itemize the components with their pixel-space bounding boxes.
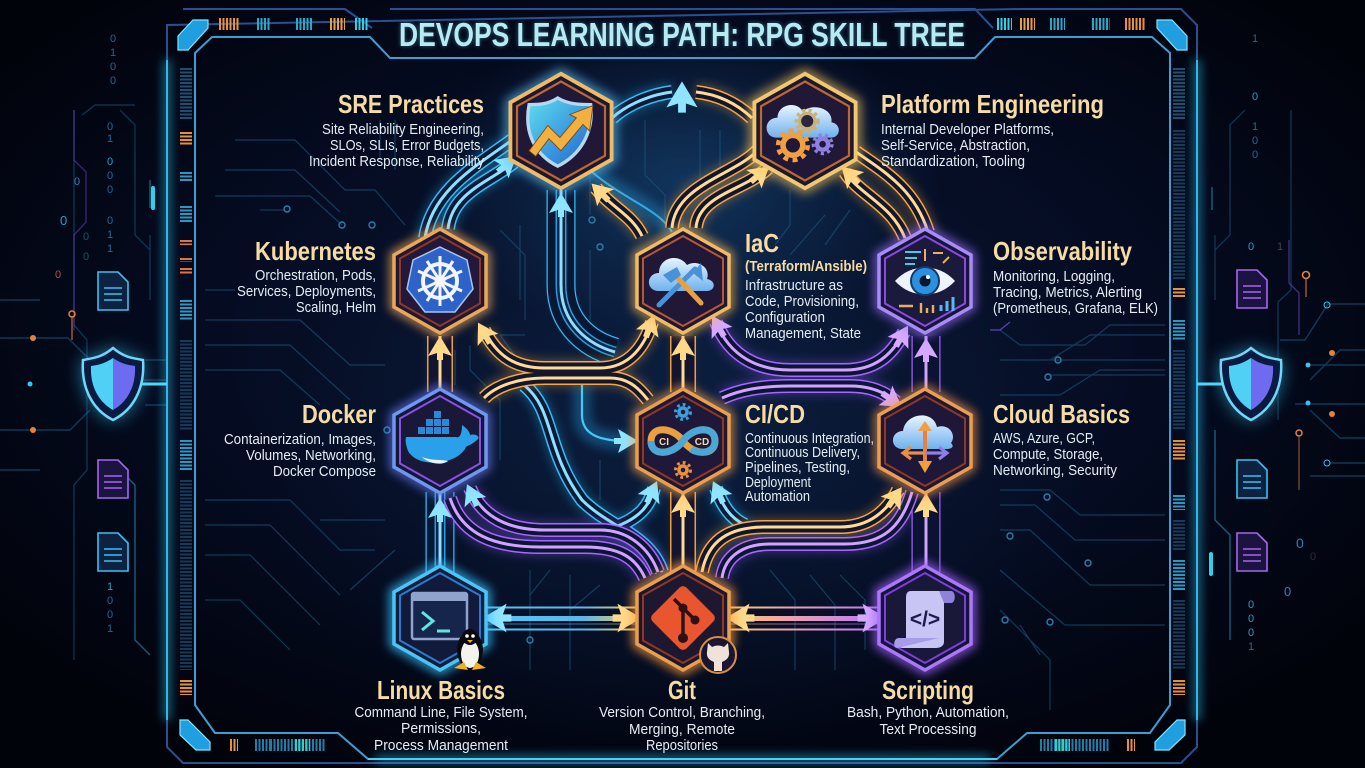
icon: right doc purple	[1237, 270, 1267, 308]
label: Platform Engineering: Platform Engineering	[881, 89, 1104, 119]
label: CI/CD: CI/CD	[745, 399, 805, 429]
led strips	[186, 24, 1179, 745]
right circuit side panel: 0	[1248, 613, 1254, 625]
label: CI/CD: Deployment	[745, 474, 812, 491]
left circuit side panel: 1	[107, 243, 113, 255]
label: SRE Practices: Incident Response, Reliability	[309, 153, 484, 170]
label: Git: Repositories	[646, 737, 718, 754]
title: DEVOPS LEARNING PATH: RPG SKILL TREE	[399, 16, 965, 53]
label: IaC: Code, Provisioning,	[745, 293, 859, 310]
hexagon node: Docker	[394, 389, 486, 493]
label: Cloud Basics: Compute, Storage,	[993, 446, 1103, 463]
label: Linux Basics	[354, 675, 528, 754]
right circuit side panel: 0	[1252, 135, 1258, 147]
icon: right doc purple lower	[1237, 533, 1267, 571]
label: Platform Engineering: Internal Developer Platforms,	[881, 121, 1054, 138]
horizontal path: Linux to Git	[486, 608, 636, 630]
hexagon node: Kubernetes	[394, 229, 486, 333]
icon: terminal window	[412, 593, 467, 639]
label: Git: Merging, Remote	[629, 721, 735, 738]
icon: infinity loop with gears: CI	[659, 437, 669, 448]
label: CI/CD: Continuous Delivery,	[745, 444, 860, 461]
left circuit side panel: 0	[55, 269, 61, 281]
icon: git logo	[649, 584, 717, 652]
hexagon node: Scripting	[879, 566, 971, 670]
icon: left doc blue lower	[98, 533, 128, 571]
hexagon node: SRE Practices	[510, 74, 612, 188]
label: IaC: Configuration	[745, 309, 825, 326]
left circuit side panel: 0	[107, 184, 113, 196]
left circuit side panel: 1	[107, 229, 113, 241]
label: Docker: Docker Compose	[273, 463, 376, 480]
icon: penguin	[454, 629, 486, 670]
label: IaC: Infrastructure as	[745, 277, 843, 294]
left circuit side panel	[0, 33, 166, 660]
label: Docker: Containerization, Images,	[224, 431, 376, 448]
left circuit side panel: 0	[60, 213, 67, 228]
right circuit side panel: 0	[1248, 599, 1254, 611]
arrowheads	[428, 81, 938, 632]
icon: docker whale	[406, 411, 479, 464]
left circuit side panel: 1	[107, 133, 113, 145]
hexagon node: IaC	[637, 229, 729, 333]
icon: left doc purple	[98, 460, 128, 498]
right circuit side panel: 0	[1284, 584, 1291, 599]
label: Kubernetes: Services, Deployments,	[237, 283, 376, 300]
label: CI/CD	[745, 399, 874, 505]
label: Scripting: Bash, Python, Automation,	[847, 704, 1009, 721]
label: CI/CD: Pipelines, Testing,	[745, 459, 850, 476]
label: Cloud Basics: AWS, Azure, GCP,	[993, 430, 1095, 447]
label: Scripting: Scripting	[882, 675, 974, 705]
hexagon node: Linux Basics	[394, 566, 486, 670]
left circuit side panel: 0	[110, 75, 116, 87]
title: DEVOPS LEARNING PATH: RPG SKILL TREE	[399, 16, 965, 53]
label: Kubernetes: Scaling, Helm	[296, 299, 376, 316]
label: Platform Engineering: Self-Service, Abstraction,	[881, 137, 1030, 154]
icon: eye with metrics	[895, 249, 955, 313]
icon: github badge	[700, 637, 736, 673]
hexagon node: Platform Engineering	[754, 74, 856, 188]
label: CI/CD: Automation	[745, 488, 810, 505]
label: SRE Practices: SLOs, SLIs, Error Budgets,	[330, 137, 484, 154]
label: Observability	[993, 236, 1158, 317]
icon: cloud with gears	[767, 105, 839, 160]
icon: kubernetes helm	[407, 247, 473, 312]
label: Kubernetes: Orchestration, Pods,	[255, 267, 376, 284]
right circuit side panel: 1	[1252, 33, 1258, 45]
left circuit side panel: 0	[83, 231, 89, 243]
label: CI/CD: Continuous Integration,	[745, 430, 874, 447]
label: IaC: Management, State	[745, 325, 861, 342]
orange paths	[440, 92, 928, 572]
left circuit side panel: 0	[107, 215, 113, 227]
left circuit side panel: 0	[107, 170, 113, 182]
left circuit side panel: 0	[110, 33, 116, 45]
right circuit side panel: 0	[1252, 91, 1258, 103]
label: Cloud Basics: Cloud Basics	[993, 399, 1130, 429]
label: Observability: Observability	[993, 236, 1132, 266]
right circuit side panel: 1	[1252, 121, 1258, 133]
label: Linux Basics: Process Management	[374, 737, 509, 754]
hexagon node: Cloud Basics	[879, 389, 971, 493]
right circuit side panel: 0	[1252, 149, 1258, 161]
label: Docker: Volumes, Networking,	[246, 447, 376, 464]
label: Cloud Basics: Networking, Security	[993, 462, 1117, 479]
left circuit side panel: 0	[107, 609, 113, 621]
label: Kubernetes	[237, 236, 376, 316]
horizontal path: Git to Scripting	[730, 608, 880, 630]
label: IaC	[745, 228, 867, 342]
label: SRE Practices: SRE Practices	[338, 89, 484, 119]
label: Scripting: Text Processing	[880, 721, 976, 738]
icon: left shield	[83, 348, 143, 420]
hexagon node: CI/CD	[637, 389, 729, 493]
left circuit side panel: 0	[83, 251, 89, 263]
right circuit side panel: 0	[1296, 535, 1304, 551]
label: SRE Practices	[309, 89, 484, 170]
label: Linux Basics: Command Line, File System,	[354, 704, 528, 721]
right circuit side panel: 0	[1310, 551, 1316, 563]
label: Platform Engineering: Standardization, Tooling	[881, 153, 1025, 170]
circuit traces inside frame	[205, 120, 1165, 710]
hexagon node: Git	[637, 566, 736, 673]
purple paths	[450, 322, 926, 578]
label: Observability: Monitoring, Logging,	[993, 268, 1115, 285]
label: Platform Engineering	[881, 89, 1104, 170]
icon: cloud with tools	[649, 258, 714, 305]
right circuit side panel: 0	[1248, 241, 1254, 253]
icon: right doc blue	[1237, 460, 1267, 498]
left circuit side panel: 0	[107, 121, 113, 133]
label: Linux Basics: Linux Basics	[377, 675, 505, 705]
left circuit side panel: 0	[110, 61, 116, 73]
label: Linux Basics: Permissions,	[401, 720, 481, 737]
hexagon node: Observability	[879, 229, 971, 333]
left circuit side panel: 1	[110, 47, 116, 59]
right circuit side panel: 1	[1277, 241, 1283, 253]
left circuit side panel: 0	[107, 156, 113, 168]
skill tree connection paths	[425, 92, 928, 630]
left circuit side panel: 1	[107, 581, 113, 593]
icon: left doc blue	[98, 272, 128, 310]
right circuit side panel: 0	[1248, 627, 1254, 639]
label: IaC: IaC	[745, 228, 779, 258]
icon: cloud with arrows	[893, 415, 953, 473]
left circuit side panel: 0	[74, 176, 80, 188]
left circuit side panel: 1	[107, 623, 113, 635]
left circuit side panel: 0	[107, 595, 113, 607]
label: Observability: (Prometheus, Grafana, ELK)	[993, 300, 1158, 317]
icon: code scroll: </>	[910, 608, 940, 631]
label: SRE Practices: Site Reliability Engineering,	[322, 121, 484, 138]
icon: infinity loop with gears	[651, 404, 715, 478]
label: Docker: Docker	[302, 399, 376, 429]
icon: shield with trend arrow	[528, 98, 593, 166]
label: Observability: Tracing, Metrics, Alerting	[993, 284, 1142, 301]
label: Git: Version Control, Branching,	[599, 704, 765, 721]
label: Cloud Basics	[993, 399, 1130, 479]
label: Git: Git	[668, 675, 696, 705]
icon: infinity loop with gears: CD	[695, 437, 709, 448]
corner accents	[178, 20, 1187, 750]
blue paths	[425, 92, 745, 572]
label: Kubernetes: Kubernetes	[255, 236, 376, 266]
label: IaC: (Terraform/Ansible)	[745, 258, 867, 275]
label: Git	[599, 675, 765, 754]
right circuit side panel	[1209, 33, 1365, 653]
icon: right shield	[1221, 348, 1281, 420]
label: Docker	[224, 399, 376, 480]
right circuit side panel: 1	[1248, 641, 1254, 653]
sci-fi frame	[142, 9, 1222, 763]
label: Scripting	[847, 675, 1009, 738]
